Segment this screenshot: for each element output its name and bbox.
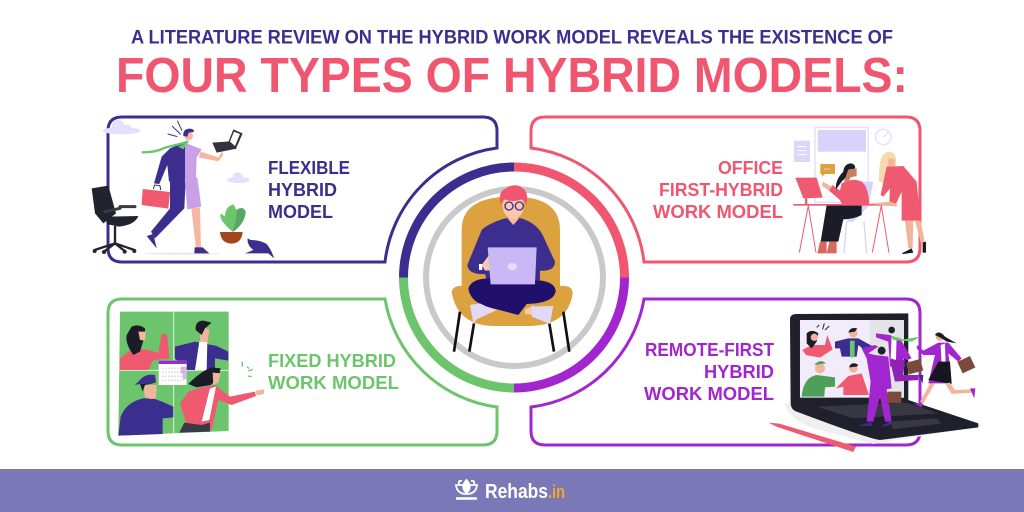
label: office first-hybrid work model: OFFICE bbox=[718, 157, 783, 178]
panel: fixed hybrid work model bbox=[108, 299, 497, 445]
panel: office first-hybrid work model bbox=[531, 117, 926, 262]
panel: flexible hybrid model bbox=[92, 117, 497, 262]
label: fixed hybrid work model: WORK MODEL bbox=[268, 372, 399, 393]
label: office first-hybrid work model: FIRST-HYBRID bbox=[659, 179, 783, 200]
label: office first-hybrid work model bbox=[653, 157, 783, 222]
label: remote-first hybrid work model: WORK MODEL bbox=[644, 383, 774, 404]
icon: red pencil bbox=[768, 423, 856, 452]
label: remote-first hybrid work model bbox=[644, 339, 775, 404]
illustration: man leaving office chair bbox=[92, 120, 274, 258]
label: flexible hybrid model: MODEL bbox=[268, 201, 333, 222]
label: fixed hybrid work model bbox=[268, 350, 399, 393]
logo: Rehabs.in bbox=[456, 480, 565, 503]
footer band bbox=[0, 469, 1024, 512]
logo: Rehabs.in: .in bbox=[548, 482, 565, 502]
label: flexible hybrid model: HYBRID bbox=[268, 179, 337, 200]
panel: remote-first hybrid work model bbox=[531, 299, 983, 452]
illustration: people on a large laptop bbox=[768, 313, 983, 452]
illustration: person with laptop in armchair bbox=[452, 185, 573, 352]
label: flexible hybrid model: FLEXIBLE bbox=[268, 157, 350, 178]
illustration: video call grid with calendar bbox=[118, 312, 264, 436]
label: flexible hybrid model bbox=[268, 157, 350, 222]
icon: lotus crown bbox=[456, 480, 477, 498]
label: remote-first hybrid work model: HYBRID bbox=[704, 361, 774, 382]
illustration: two women at office desk bbox=[793, 127, 926, 254]
title: FOUR TYPES OF HYBRID MODELS: bbox=[116, 49, 908, 103]
logo: Rehabs.in: Rehabs bbox=[485, 481, 548, 503]
title: A LITERATURE REVIEW ON THE HYBRID WORK MODEL REVEALS THE EXISTENCE OF bbox=[131, 28, 893, 48]
label: office first-hybrid work model: WORK MODEL bbox=[653, 201, 783, 222]
label: remote-first hybrid work model: REMOTE-FIRST bbox=[645, 339, 775, 360]
label: fixed hybrid work model: FIXED HYBRID bbox=[268, 350, 396, 371]
title bbox=[116, 28, 908, 103]
central ring bbox=[404, 167, 624, 388]
